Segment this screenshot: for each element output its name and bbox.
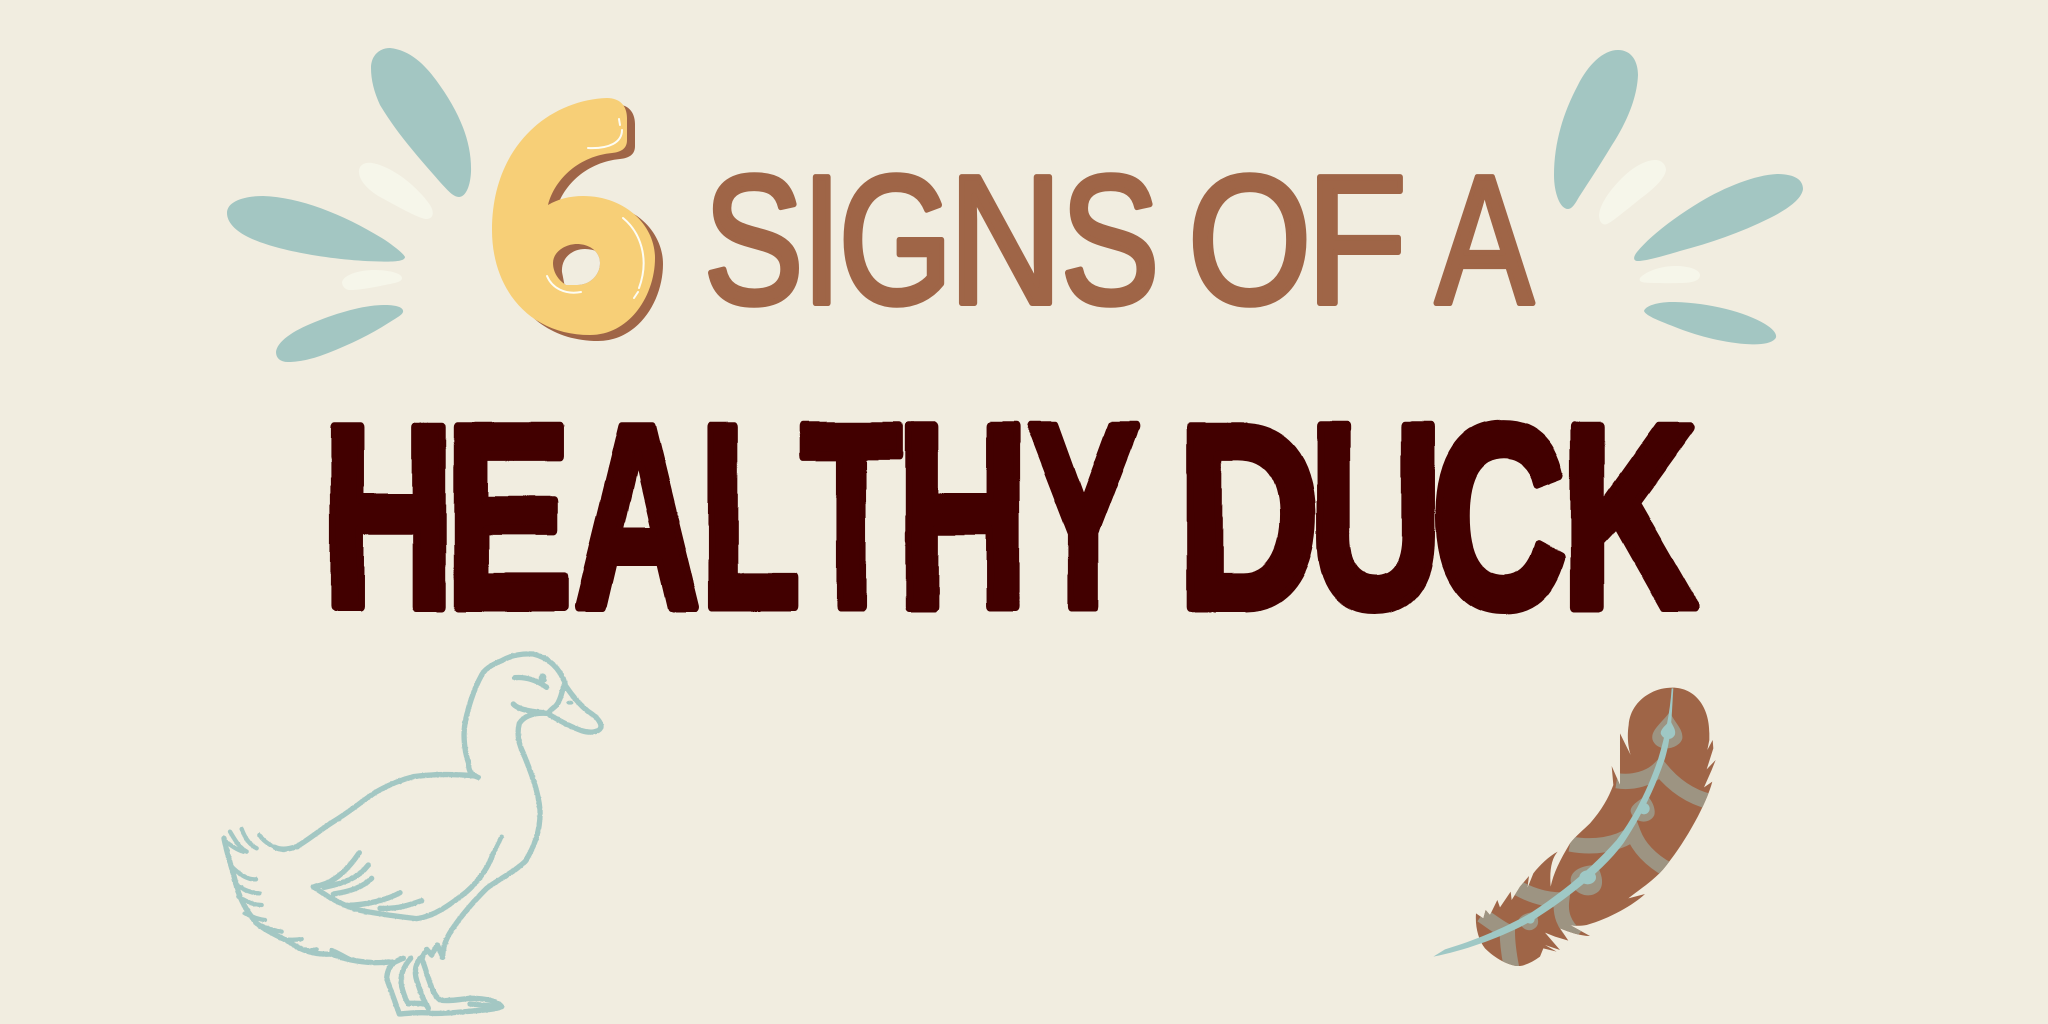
heading: HEALTHY DUCK: U <box>1310 371 1443 664</box>
heading: SIGNS OF A: G <box>839 139 953 343</box>
heading: SIGNS OF A: S <box>1061 138 1159 343</box>
heading: HEALTHY DUCK: D <box>1177 371 1320 663</box>
icon: duck line drawing <box>224 654 601 1014</box>
heading: SIGNS OF A: A <box>1436 139 1534 343</box>
infographic canvas <box>221 48 1803 1017</box>
big yellow numeral 6 <box>492 98 663 341</box>
heading: HEALTHY DUCK: T <box>800 371 901 663</box>
heading: SIGNS OF A: N <box>949 138 1062 343</box>
heading: HEALTHY DUCK: E <box>445 370 572 663</box>
heading: SIGNS OF A: O <box>1188 139 1311 343</box>
heading: HEALTHY DUCK: L <box>701 371 801 663</box>
heading: HEALTHY DUCK: C <box>1431 371 1567 663</box>
icon: feather <box>1433 688 1716 968</box>
heading: HEALTHY DUCK <box>322 370 1697 664</box>
heading: HEALTHY DUCK: K <box>1561 370 1697 663</box>
right petal burst <box>1554 50 1803 344</box>
heading: HEALTHY DUCK: H <box>896 370 1029 663</box>
heading: SIGNS OF A <box>704 137 1534 343</box>
heading: HEALTHY DUCK: H <box>322 370 455 663</box>
left petal burst <box>227 48 471 362</box>
heading: SIGNS OF A: F <box>1306 137 1407 342</box>
heading: HEALTHY DUCK: A <box>573 371 701 663</box>
heading: SIGNS OF A: S <box>704 139 803 342</box>
heading: SIGNS OF A: I <box>802 137 841 342</box>
heading: HEALTHY DUCK: Y <box>1027 370 1139 663</box>
